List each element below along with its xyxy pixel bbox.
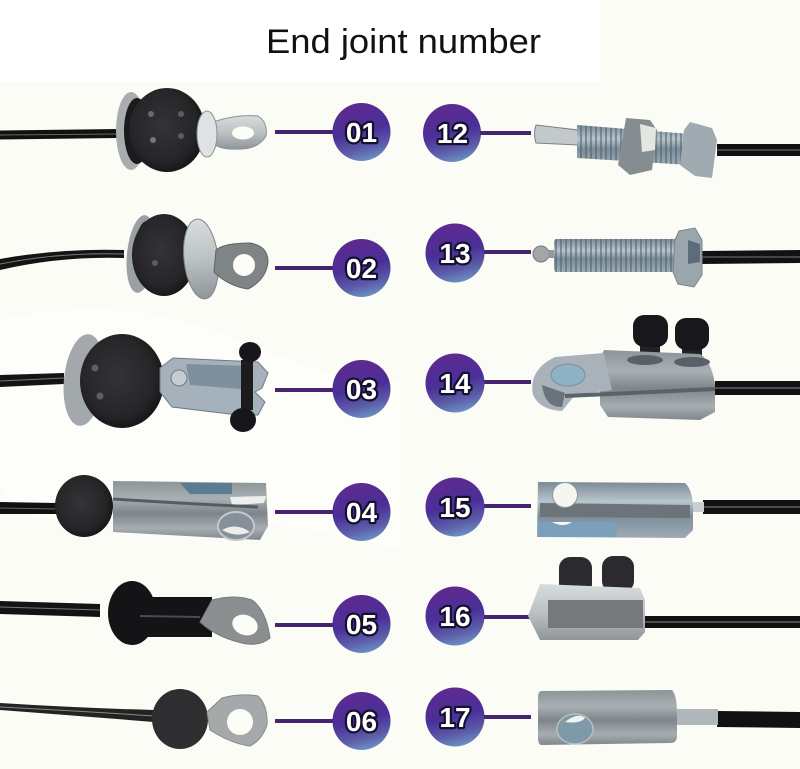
connector and badge 14: 14 — [439, 368, 471, 399]
connector and badge 02: 02 — [346, 253, 377, 284]
connector and badge 15 — [426, 478, 531, 536]
joint 17: cylinder with cross hole — [538, 690, 800, 745]
connector and badge 13: 13 — [439, 238, 471, 269]
joint 01: ball with silver eyelet — [0, 88, 266, 172]
joint 03: ball with fork clevis — [0, 332, 268, 432]
connector and badge 16 — [426, 586, 531, 646]
connector and badge 03: 03 — [346, 374, 377, 405]
connector and badge 01 — [275, 103, 390, 161]
connector and badge 01: 01 — [346, 117, 377, 148]
joint 14: eye body with two socket screws — [532, 315, 800, 420]
connector and badge 06 — [275, 692, 390, 750]
joint 04: ball with slotted cylinder — [0, 475, 268, 540]
joint 06: ball with flat eyelet — [0, 689, 267, 749]
connector and badge 05 — [275, 595, 390, 653]
joint 12: threaded bolt with nut — [534, 118, 800, 178]
connector and badge 12 — [423, 104, 531, 162]
connector and badge 17: 17 — [439, 702, 471, 733]
joint 02: ball with cap and eyelet — [0, 214, 268, 301]
joint 13: threaded bolt with ball tip — [533, 228, 800, 287]
connector and badge 04: 04 — [346, 497, 377, 528]
connector and badge 04 — [275, 483, 390, 541]
connector and badge 16: 16 — [439, 601, 471, 632]
connector and badge 03 — [275, 360, 390, 418]
connector and badge 12: 12 — [437, 118, 468, 149]
connector and badge 17 — [426, 688, 531, 746]
connector and badge 02 — [275, 239, 390, 297]
connector and badge 05: 05 — [346, 609, 377, 640]
connector and badge 14 — [426, 354, 531, 412]
connector and badge 06: 06 — [346, 706, 377, 737]
joint 15: slotted cylinder — [537, 482, 800, 538]
title: End joint number — [266, 23, 541, 61]
connector and badge 13 — [426, 224, 531, 282]
joint 16: hex body with two socket screws — [528, 556, 800, 640]
connector and badge 15: 15 — [439, 492, 471, 523]
joint 05: black sleeve with eyelet — [0, 581, 270, 645]
